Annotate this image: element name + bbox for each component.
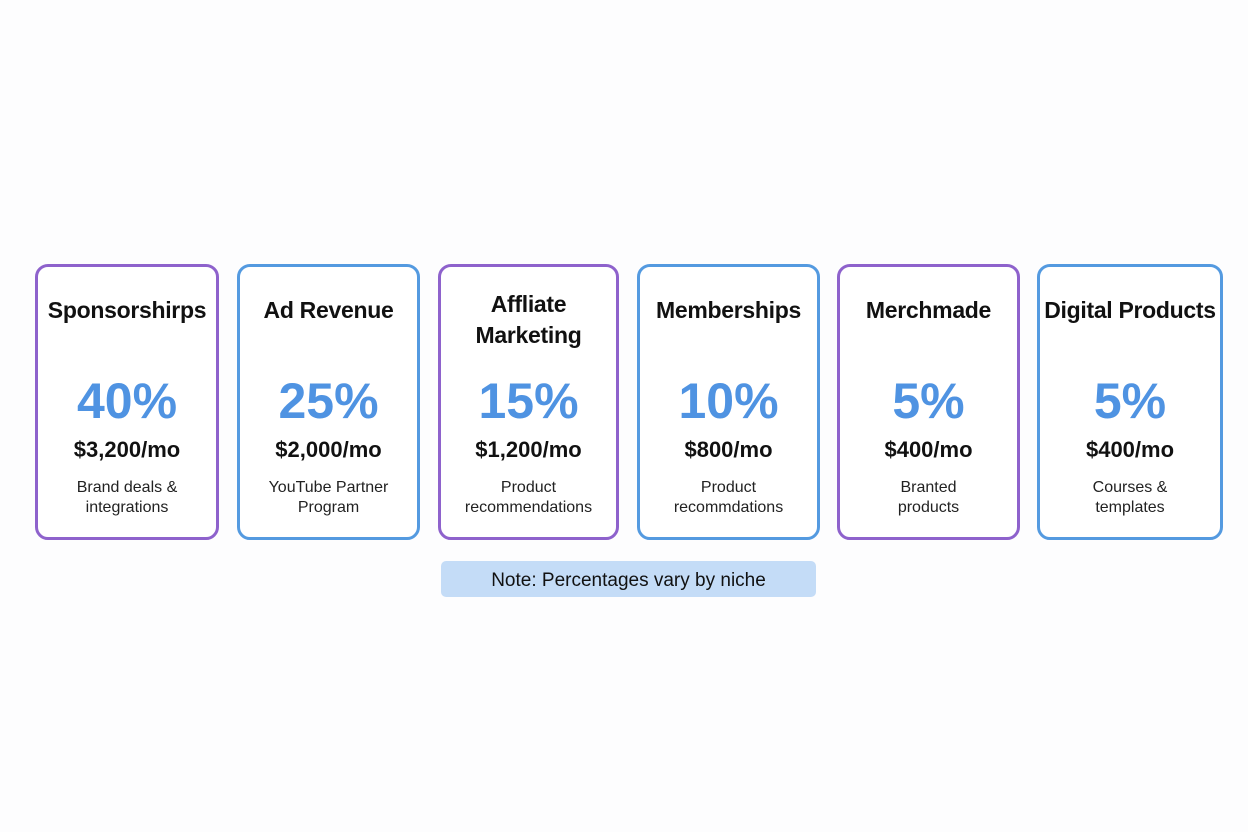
amount: $2,000/mo	[275, 437, 382, 462]
amount: $3,200/mo	[74, 437, 180, 462]
description	[674, 479, 783, 516]
description: products	[898, 499, 959, 516]
heading: Sponsorshirps	[48, 297, 206, 323]
heading	[476, 291, 581, 348]
card: memberships	[637, 264, 820, 540]
description: Branted	[900, 479, 957, 496]
card: sponsorships	[35, 264, 219, 540]
heading: Affliate	[491, 291, 566, 317]
percentage: 5%	[1094, 373, 1166, 429]
description: templates	[1095, 499, 1165, 516]
note: Note: Percentages vary by niche	[491, 570, 766, 591]
description: Program	[298, 499, 359, 516]
percentage: 40%	[77, 373, 177, 429]
description	[1093, 479, 1168, 516]
heading: Marketing	[476, 322, 581, 348]
amount: $800/mo	[684, 437, 773, 462]
description: Courses &	[1093, 479, 1167, 496]
heading: Digital Products	[1044, 297, 1216, 323]
amount: $400/mo	[884, 437, 973, 462]
percentage: 5%	[892, 373, 965, 429]
description	[77, 479, 178, 516]
amount: $1,200/mo	[475, 437, 582, 462]
description: recommdations	[674, 499, 783, 516]
heading: Memberships	[656, 297, 801, 323]
percentage: 10%	[678, 373, 779, 429]
percentage: 25%	[278, 373, 379, 429]
percentage: 15%	[478, 373, 579, 429]
card: merch	[837, 264, 1020, 540]
card: affiliate marketing	[438, 264, 619, 540]
description: integrations	[86, 499, 168, 516]
description	[269, 479, 388, 516]
card: digital products	[1037, 264, 1223, 540]
note	[441, 561, 816, 597]
description: Brand deals &	[77, 479, 177, 496]
amount: $400/mo	[1086, 437, 1174, 462]
description: Product	[701, 479, 756, 496]
description: recommendations	[465, 499, 592, 516]
heading: Merchmade	[866, 297, 991, 323]
heading: Ad Revenue	[264, 297, 393, 323]
description	[465, 479, 592, 516]
description: Product	[501, 479, 556, 496]
card: ad revenue	[237, 264, 420, 540]
description	[898, 479, 959, 516]
description: YouTube Partner	[269, 479, 388, 496]
